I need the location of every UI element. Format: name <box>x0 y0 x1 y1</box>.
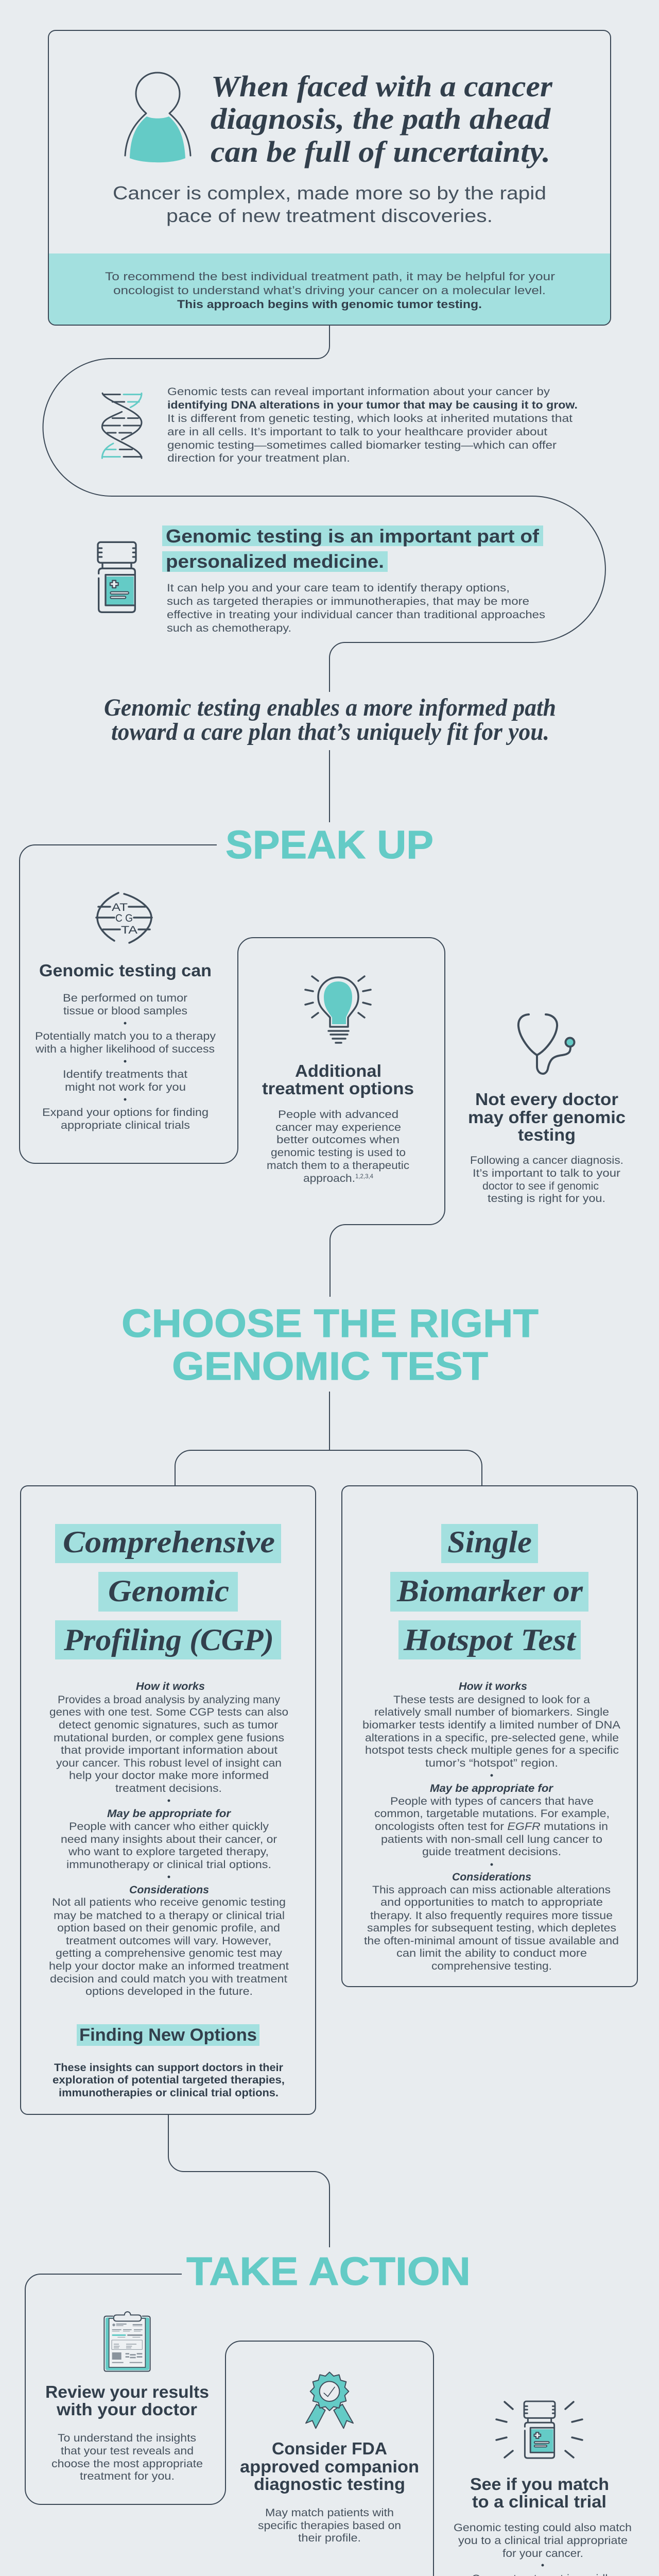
text block: how it works: mutational burden, or complex gene fusions <box>54 1732 284 1744</box>
icon: ATCG: TA <box>121 924 137 936</box>
icon: ATCG: AT <box>112 902 128 913</box>
text block: may be appropriate for: People with cancer who either quickly <box>69 1821 269 1833</box>
text block: for your cancer. <box>502 2548 583 2560</box>
text block: testing is right for you. <box>488 1193 605 1205</box>
icon: lightbulb <box>305 976 371 1043</box>
heading: choose the right genomic test: GENOMIC TEST <box>172 1344 488 1388</box>
icon: ATCG <box>96 893 152 943</box>
text block: may be appropriate for: common, targetable mutations. For example, <box>374 1808 610 1820</box>
text block: genomic tests: It is different from genetic testing, which looks at inherited mutations that <box>167 413 573 425</box>
text block: intro band: This approach begins with genomic tumor testing. <box>177 298 482 311</box>
connector: to take action <box>168 2114 330 2247</box>
text block: that your test reveals and <box>61 2445 194 2457</box>
text block: considerations: may be matched to a therapy or clinical trial <box>54 1910 285 1922</box>
panel: comprehensive genomic profiling <box>21 1486 316 2114</box>
text block: may be appropriate for <box>61 1808 277 1878</box>
heading: choose the right genomic test <box>122 1301 539 1388</box>
list: Be performed on tumor <box>63 992 187 1004</box>
panel: FDA approved companion diagnostic <box>240 2439 419 2544</box>
subtitle <box>113 182 546 226</box>
heading: with your doctor <box>56 2400 197 2419</box>
text block: considerations: Considerations <box>129 1884 209 1896</box>
text block: People with advanced <box>278 1109 398 1121</box>
text block: how it works: help your doctor make more informed <box>69 1770 269 1782</box>
heading: See if you match <box>470 2475 609 2494</box>
text block: considerations: help your doctor make an informed treatment <box>49 1960 289 1972</box>
heading: testing <box>518 1125 576 1144</box>
text block: intro band <box>105 270 555 311</box>
icon: clipboard <box>104 2312 150 2371</box>
heading: personalized medicine: personalized medicine. <box>166 551 384 572</box>
text block: genomic tests: direction for your treatment plan. <box>167 452 350 464</box>
text block: Genomic testing could also match <box>454 2522 632 2534</box>
heading: approved companion <box>240 2457 419 2476</box>
text block: considerations: the often-minimal amount of tissue available and <box>364 1935 619 1947</box>
text block: care team: such as targeted therapies or immunotherapies, that may be more <box>167 596 529 607</box>
text block: genomic testing is used to <box>271 1147 406 1159</box>
text block: how it works: How it works <box>136 1681 205 1692</box>
text block: may be appropriate for: need many insights about their cancer, or <box>61 1834 277 1845</box>
panel: review your results <box>45 2382 209 2482</box>
heading <box>390 1524 588 1659</box>
connector: branch to test panels <box>175 1392 482 1486</box>
text block: It’s important to talk to your <box>473 1167 620 1179</box>
heading: take action: TAKE ACTION <box>186 2249 471 2294</box>
text block: insights <box>53 2062 285 2099</box>
text block: better outcomes when <box>276 1134 400 1146</box>
icon: bottle with rays <box>496 2401 582 2458</box>
text block: insights: exploration of potential targeted therapies, <box>53 2074 285 2086</box>
text block: considerations: treatment outcomes will vary. However, <box>66 1935 271 1947</box>
heading: to a clinical trial <box>472 2492 606 2511</box>
text block: considerations: and opportunities to match to appropriate <box>380 1896 603 1908</box>
text block: may be appropriate for: oncologists often test for EGFR mutations in <box>375 1821 608 1833</box>
text block: may be appropriate for: May be appropriate for <box>430 1783 554 1794</box>
heading <box>468 1090 626 1144</box>
text block: considerations: options developed in the future. <box>85 1986 253 1997</box>
subtitle: pace of new treatment discoveries. <box>166 205 493 226</box>
list: Potentially match you to a therapy <box>35 1030 216 1042</box>
text block: insights: immunotherapies or clinical trial options. <box>59 2087 279 2099</box>
icon: medicine bottle <box>98 542 136 612</box>
connector: serpentine path <box>43 325 605 692</box>
heading: Genomic testing can <box>39 961 212 980</box>
title: diagnosis, the path ahead <box>211 102 551 135</box>
text block: how it works: Provides a broad analysis by analyzing many <box>58 1694 281 1706</box>
text block: match them to a therapeutic <box>267 1160 409 1172</box>
text block: how it works <box>362 1681 620 1776</box>
text block: intro band: To recommend the best individual treatment path, it may be helpful for your <box>105 270 555 283</box>
panel: clinical trial <box>454 2475 632 2576</box>
text block: considerations: samples for subsequent testing, which depletes <box>367 1922 616 1934</box>
heading: Consider FDA <box>272 2439 387 2458</box>
panel: genomic testing can <box>35 961 216 1131</box>
text block: may be appropriate for: immunotherapy or clinical trial options. <box>66 1859 271 1871</box>
callout: informed path: Genomic testing enables a more informed path <box>104 694 556 721</box>
text block: considerations: getting a comprehensive genomic test may <box>56 1947 283 1959</box>
heading: Not every doctor <box>475 1090 618 1109</box>
text block: considerations <box>49 1884 289 1997</box>
text block: may be appropriate for: People with types of cancers that have <box>390 1795 594 1807</box>
heading <box>240 2439 419 2494</box>
heading: personalized medicine: Genomic testing is an important part of <box>166 526 540 547</box>
heading: choose the right genomic test: CHOOSE THE RIGHT <box>122 1301 539 1346</box>
subtitle: Cancer is complex, made more so by the rapid <box>113 182 546 204</box>
text block: how it works: biomarker tests identify a limited number of DNA <box>362 1719 620 1731</box>
text block: genomic tests: identifying DNA alterations in your tumor that may be causing it to grow. <box>167 399 578 411</box>
text block: doctor to see if genomic <box>482 1180 599 1192</box>
text block <box>51 2432 203 2482</box>
text block: choose the most appropriate <box>51 2458 203 2470</box>
text block: May match patients with <box>265 2507 394 2519</box>
text block: may be appropriate for: patients with non-small cell lung cancer to <box>381 1834 602 1845</box>
panel: single biomarker or hotspot test <box>342 1486 637 1987</box>
heading: Comprehensive <box>63 1525 275 1559</box>
title: can be full of uncertainty. <box>211 135 550 168</box>
heading <box>55 1524 281 1659</box>
text block <box>258 2507 401 2544</box>
list: tissue or blood samples <box>63 1005 187 1017</box>
text block: you to a clinical trial appropriate <box>458 2535 628 2547</box>
text block: may be appropriate for: guide treatment decisions. <box>422 1846 561 1858</box>
heading: Hotspot Test <box>403 1623 577 1657</box>
heading: may offer genomic <box>468 1108 626 1127</box>
connector: speak up panels outline <box>20 845 445 1297</box>
text block <box>454 2522 632 2576</box>
text block: approach. <box>303 1173 355 1184</box>
heading: Profiling (CGP) <box>63 1623 274 1657</box>
text block: considerations: Considerations <box>452 1871 531 1883</box>
text block: genomic tests <box>167 386 578 464</box>
connector: to speak up <box>329 750 330 822</box>
text block: how it works: your cancer. This robust level of insight can <box>56 1757 282 1769</box>
text block: intro band: oncologist to understand what’s driving your cancer on a molecular level. <box>113 284 546 297</box>
text block: care team: effective in treating your individual cancer than traditional approaches <box>167 609 545 621</box>
list <box>35 992 216 1131</box>
heading <box>262 1061 414 1098</box>
list: might not work for you <box>65 1081 186 1093</box>
heading: finding new options: Finding New Options <box>79 2025 257 2045</box>
text block: treatment for you. <box>80 2470 175 2482</box>
text block: considerations: option based on their genomic profile, and <box>57 1922 280 1934</box>
icon: person <box>125 73 190 162</box>
text block: specific therapies based on <box>258 2520 401 2532</box>
text block: how it works: relatively small number of biomarkers. Single <box>374 1706 609 1718</box>
text block: care team: such as chemotherapy. <box>167 622 291 634</box>
heading: personalized medicine <box>162 526 543 572</box>
text block: how it works: genes with one test. Some CGP tests can also <box>49 1706 288 1718</box>
panel: not every doctor <box>468 1090 626 1205</box>
text block: considerations: therapy. It also frequently requires more tissue <box>370 1910 613 1922</box>
text block: how it works: tumor’s “hotspot” region. <box>425 1757 558 1769</box>
title: When faced with a cancer <box>211 70 552 103</box>
heading: Additional <box>295 1061 381 1080</box>
heading <box>45 2382 209 2419</box>
text block: Following a cancer diagnosis. <box>470 1155 623 1166</box>
text block: how it works: How it works <box>459 1681 527 1692</box>
text block: how it works <box>49 1681 288 1802</box>
callout: informed path: toward a care plan that’s uniquely fit for you. <box>111 718 549 745</box>
text block: considerations: This approach can miss actionable alterations <box>372 1884 611 1896</box>
text block: considerations: comprehensive testing. <box>431 1960 552 1972</box>
heading: Single <box>447 1525 532 1559</box>
text block: may be appropriate for <box>374 1783 610 1866</box>
icon: DNA <box>102 393 142 458</box>
text block: genomic tests: Genomic tests can reveal important information about your cancer by <box>167 386 550 398</box>
callout: informed path <box>104 694 556 745</box>
text block: how it works: These tests are designed to look for a <box>393 1694 590 1706</box>
text block: insights: These insights can support doctors in their <box>54 2062 283 2074</box>
heading: Review your results <box>45 2382 209 2401</box>
heading: Genomic <box>108 1574 229 1608</box>
panel: intro <box>48 30 611 325</box>
icon: ATCG: C G <box>115 912 133 924</box>
text block: care team <box>167 582 545 634</box>
connector: take action panels outline <box>25 2274 433 2576</box>
text block: considerations: decision and could match you with treatment <box>50 1973 287 1985</box>
text block: considerations <box>364 1871 619 1972</box>
text block: may be appropriate for: who want to explore targeted therapy, <box>68 1846 269 1858</box>
icon: stethoscope <box>518 1014 575 1074</box>
text block <box>267 1109 409 1184</box>
list: Identify treatments that <box>63 1069 187 1080</box>
text block: how it works: that provide important information about <box>61 1744 278 1756</box>
text block: considerations: Not all patients who receive genomic testing <box>52 1896 286 1908</box>
text block: their profile. <box>298 2532 361 2544</box>
text block: may be appropriate for: May be appropriate for <box>107 1808 232 1820</box>
heading: treatment options <box>262 1079 414 1098</box>
text block: genomic tests: are in all cells. It’s important to talk to your healthcare provider about <box>167 426 547 438</box>
heading: diagnostic testing <box>254 2475 405 2494</box>
heading: speak up: SPEAK UP <box>226 823 433 867</box>
text block: genomic tests: genomic testing—sometimes called biomarker testing—which can offer <box>167 439 557 451</box>
heading <box>470 2475 609 2511</box>
text block: how it works: hotspot tests check multiple genes for a specific <box>365 1744 619 1756</box>
text block: 1,2,3,4 <box>355 1173 373 1180</box>
list: with a higher likelihood of success <box>35 1043 215 1055</box>
title <box>211 70 552 168</box>
icon: award ribbon <box>306 2372 353 2428</box>
text block: how it works: alterations in a specific, pre-selected gene, while <box>365 1732 619 1744</box>
heading: Biomarker or <box>396 1574 583 1608</box>
text block: how it works: detect genomic signatures, such as tumor <box>59 1719 278 1731</box>
list: appropriate clinical trials <box>61 1120 190 1131</box>
text block <box>470 1155 623 1205</box>
text block: how it works: treatment decisions. <box>115 1783 222 1794</box>
text block: care team: It can help you and your care team to identify therapy options, <box>167 582 510 594</box>
text block: cancer may experience <box>275 1122 401 1133</box>
text block: To understand the insights <box>58 2432 196 2444</box>
panel: additional treatment options <box>262 1061 414 1184</box>
list: Expand your options for finding <box>42 1107 209 1118</box>
text block: considerations: can limit the ability to conduct more <box>396 1947 587 1959</box>
